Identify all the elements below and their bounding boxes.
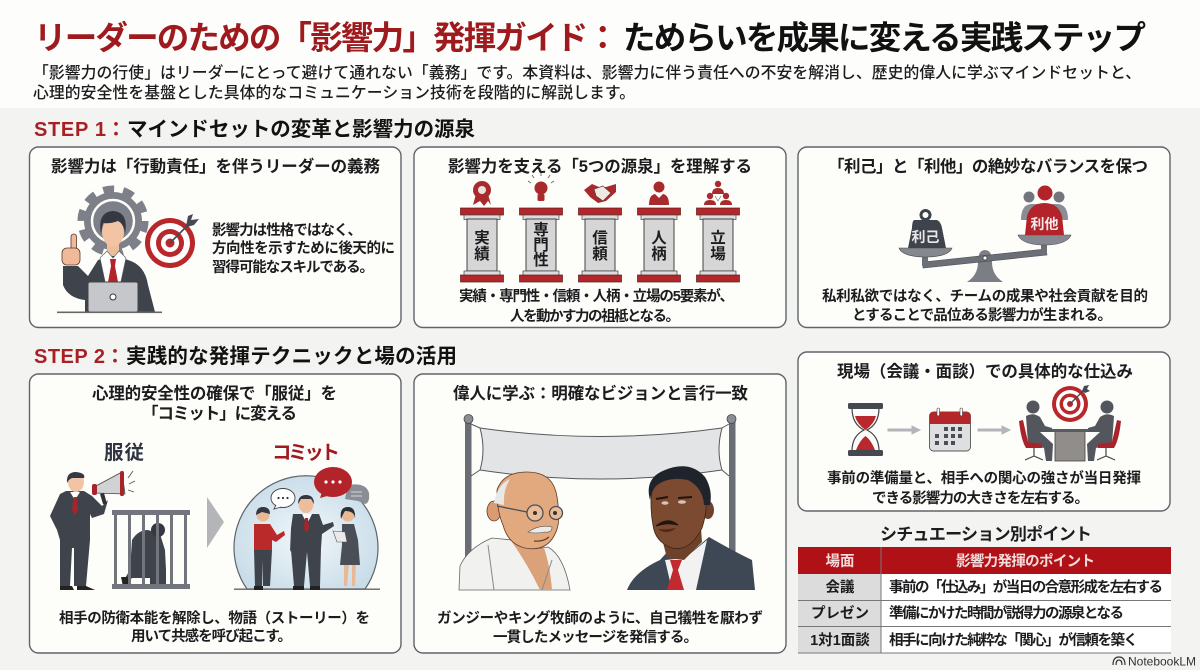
pillar: 立場: 立	[710, 229, 726, 247]
illustration: Martin Luther King Jr.	[627, 466, 755, 590]
pillar: 実績	[460, 181, 504, 282]
heading: step 2: ：	[105, 346, 125, 368]
intro text: 「影響力の行使」はリーダーにとって避けて通れない「義務」です。本資料は、影響力に伴う責任への不安を解消し、歴史的偉人に学ぶマインドセットと、	[33, 63, 1141, 82]
icon: balance scale	[899, 186, 1071, 282]
illustration: Gandhi	[459, 472, 570, 590]
panel heading: preparation: 現場（会議・面談）での具体的な仕込み	[837, 362, 1133, 381]
text: commitment description: 用いて共感を呼び起こす。	[131, 627, 292, 645]
figure: team in safety dome	[234, 467, 380, 590]
icon: balance scale: 利他	[1030, 216, 1058, 232]
icon: calendar	[930, 408, 970, 451]
heading: step 1: STEP 1	[34, 119, 106, 141]
text: duty description: 影響力は性格ではなく、	[212, 221, 362, 239]
text: preparation description: できる影響力の大きさを左右する。	[872, 489, 1089, 507]
text: duty description: 習得可能なスキルである。	[212, 258, 374, 276]
pillar: 専門性: 性	[533, 250, 549, 269]
icon: target above meeting	[1052, 385, 1090, 422]
panel heading: sources: 影響力を支える「5つの源泉」を理解する	[448, 156, 752, 176]
intro text	[33, 63, 1141, 102]
table: situation points: 1対1面談	[810, 631, 870, 649]
pillar: 信頼: 信	[592, 229, 608, 247]
text: great figures description: ガンジーやキング牧師のように、自己犠牲を厭わず	[437, 609, 763, 627]
pillar: 専門性: 門	[533, 236, 549, 254]
icon: hourglass	[848, 403, 883, 456]
text: great figures description	[437, 609, 763, 646]
text: balance description: 私利私欲ではなく、チームの成果や社会貢献を目的	[822, 287, 1148, 305]
title: ためらいを成果に変える実践ステップ	[623, 20, 1146, 56]
arrow: calendar to meeting	[978, 426, 1010, 434]
pillar: 信頼: 頼	[592, 245, 608, 263]
label: commit: コミット	[272, 442, 340, 464]
pillar: 実績: 績	[474, 245, 490, 263]
heading: situation points: シチュエーション別ポイント	[880, 524, 1092, 544]
text: sources description: 人を動かす力の祖柢となる。	[510, 307, 680, 325]
text: commitment description	[59, 609, 370, 645]
text: balance description: とすることで品位ある影響力が生まれる。	[852, 306, 1112, 324]
table: situation points: 会議	[826, 578, 855, 596]
text: balance description	[822, 287, 1148, 324]
watermark: NotebookLM: NotebookLM	[1128, 654, 1196, 668]
panel: leadership duty	[30, 147, 401, 328]
figure: kneeling man in cage	[112, 510, 190, 589]
panel: obedience to commitment	[30, 374, 401, 653]
icon: target	[145, 214, 199, 268]
table: situation points: プレゼン	[811, 604, 869, 622]
text: duty description: 方向性を示すために後天的に	[212, 239, 395, 257]
table: situation points: 事前の「仕込み」が当日の合意形成を左右する	[889, 578, 1163, 596]
pillar: 人柄: 柄	[651, 245, 667, 263]
arrow: transition	[207, 497, 224, 548]
text: sources description: 実績・専門性・信頼・人柄・立場の5要素が、	[459, 287, 734, 305]
pillar: 実績: 実	[474, 229, 490, 247]
arrow: hourglass to calendar	[888, 426, 920, 434]
panel: concrete preparation	[798, 352, 1170, 511]
icon: leader with gear and laptop	[57, 189, 162, 313]
figure: commander with megaphone	[50, 471, 135, 590]
text: preparation description	[827, 469, 1141, 507]
table: situation points: 場面	[826, 553, 854, 570]
illustration: banner on poles	[464, 414, 736, 560]
pillar: 人柄: 人	[651, 230, 667, 247]
text: great figures description: 一貫したメッセージを発信する。	[493, 628, 698, 646]
title	[34, 19, 1146, 56]
table: situation points: 影響力発揮のポイント	[956, 552, 1095, 570]
pillar: 人柄	[638, 182, 680, 282]
table: situation points	[798, 547, 1171, 653]
label: obedience: 服従	[104, 442, 144, 464]
panel heading: balance: 「利己」と「利他」の絶妙なバランスを保つ	[828, 157, 1148, 176]
panel heading: commitment	[92, 383, 337, 423]
intro text: 心理的安全性を基盤とした具体的なコミュニケーション技術を段階的に解説します。	[33, 84, 635, 102]
pillar: 専門性	[520, 173, 562, 282]
panel heading: commitment: 心理的安全性の確保で「服従」を	[92, 383, 337, 403]
pillar: 立場	[696, 181, 740, 282]
text: duty description	[212, 221, 395, 276]
pillar: 信頼	[578, 184, 622, 282]
text: sources description	[459, 287, 734, 325]
pillar: 立場: 場	[710, 245, 726, 263]
heading: step 2: 実践的な発揮テクニックと場の活用	[126, 345, 457, 368]
heading: step 1: ：	[106, 119, 126, 141]
icon: balance scale: 利己	[912, 229, 940, 245]
panel heading: commitment: 「コミット」に変える	[142, 404, 297, 423]
heading: step 2: STEP 2	[34, 346, 105, 368]
table: situation points: 相手に向けた純粋な「関心」が信頼を築く	[889, 631, 1138, 649]
panel heading: great figures: 偉人に学ぶ：明確なビジョンと言行一致	[453, 383, 748, 403]
panel: balance	[798, 147, 1170, 328]
pillar: 専門性: 専	[533, 220, 549, 239]
heading: step 1: マインドセットの変革と影響力の源泉	[127, 118, 476, 141]
title: リーダーのための「影響力」発揮ガイド：	[34, 19, 619, 56]
text: preparation description: 事前の準備量と、相手への関心の強さが当日発揮	[827, 469, 1141, 487]
panel heading: duty: 影響力は「行動責任」を伴うリーダーの義務	[51, 156, 380, 176]
text: commitment description: 相手の防衛本能を解除し、物語（ストーリー）を	[59, 609, 370, 627]
table: situation points: 準備にかけた時間が説得力の源泉となる	[889, 604, 1124, 622]
panel: five sources	[414, 147, 786, 328]
icon: meeting at table	[1019, 400, 1121, 461]
panel: learn from great figures	[414, 374, 786, 653]
